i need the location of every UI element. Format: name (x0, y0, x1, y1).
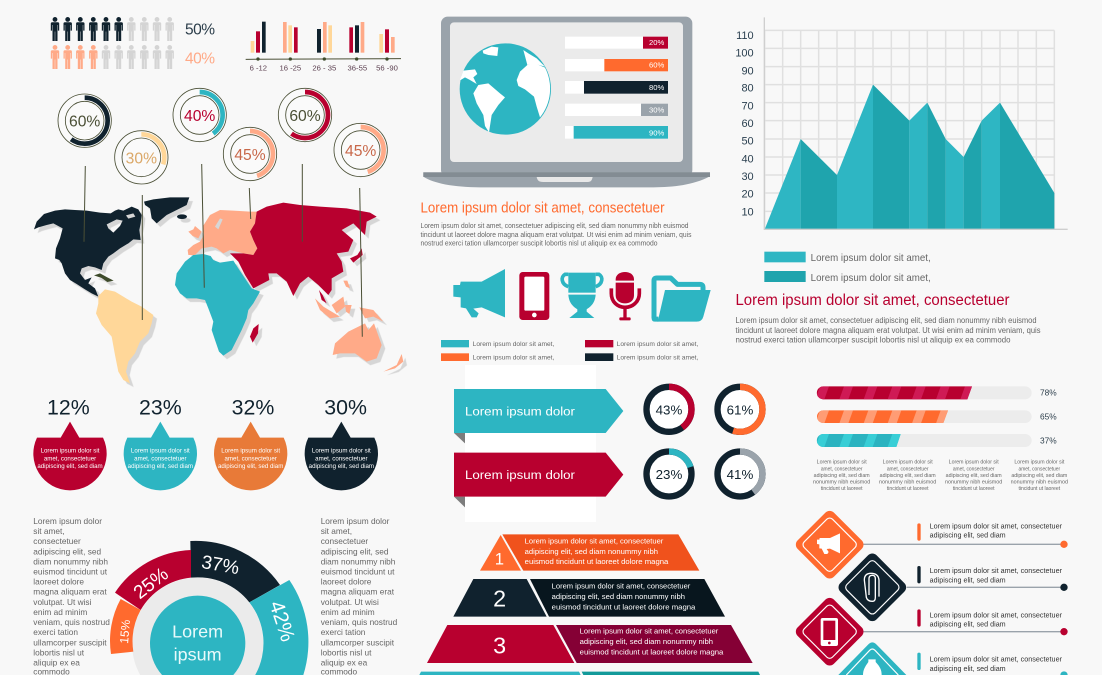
ring: 40% teal (173, 88, 226, 142)
caption column 4: nonummy nibh euismod (1011, 479, 1068, 485)
caption column 4: tincidunt ut laoreet (1018, 486, 1061, 492)
right text block: lobortis nisl ut (321, 647, 372, 657)
age group bar chart: 36-55 (348, 64, 367, 73)
item: teal bottle (838, 642, 1068, 675)
callout: 23% (124, 395, 197, 490)
legend: crimson (585, 340, 698, 348)
right text block: veniam, quis nostrud (321, 617, 398, 627)
left text block: veniam, quis nostrud (33, 617, 110, 627)
y axis labels: 50 (741, 136, 754, 148)
donut: 61% (717, 387, 762, 432)
age group bar chart: 6 -12 (250, 64, 267, 73)
right text block: diam nonummy nibh (321, 556, 396, 566)
y axis labels: 20 (741, 189, 754, 201)
left text block: magna aliquam erat (33, 587, 107, 597)
arrow: crimson (454, 453, 623, 507)
caption column 3 (945, 460, 1002, 492)
caption column 3: tincidunt ut laoreet (953, 486, 995, 492)
segment: 42%: 42% (265, 598, 299, 645)
caption column 1 (813, 460, 870, 492)
arrow: teal: Lorem ipsum dolor (465, 404, 575, 418)
item: teal bottle: adipiscing elit, sed diam (930, 666, 1006, 673)
caption column 1: adipiscing elit, sed diam (814, 473, 870, 479)
caption column 4: amet, consectetuer (1018, 466, 1060, 472)
left text block: enim ad minim (33, 607, 87, 617)
asia (230, 203, 377, 296)
y axis labels: 60 (741, 118, 754, 130)
age group bar chart: 56 -90 (376, 64, 398, 73)
laptop heading: Lorem ipsum dolor sit amet, consectetuer (420, 200, 665, 216)
arrows and donuts panel (454, 365, 762, 522)
greenland (144, 197, 189, 223)
ring: 45% salmon: 45% (234, 147, 266, 164)
drop callouts (33, 395, 378, 490)
laptop body text: tincidunt ut laoreet dolore magna aliquam erat volutpat. Ut wisi enim ad minim veniam, quis (420, 230, 692, 239)
y axis labels (735, 30, 754, 218)
progress: 78% (815, 386, 1057, 399)
caption column 2: tincidunt ut laoreet (887, 486, 929, 492)
chart body text: nostrud exerci tation ullamcorper suscipit lobortis nisl ut aliquip ex ea commodo (736, 336, 1011, 344)
tier 2: adipiscing elit, sed diam nonummy nibh (552, 594, 685, 601)
legend: navy: Lorem ipsum dolor sit amet, (617, 354, 698, 361)
callout: 23%: 23% (139, 395, 182, 419)
left text block: diam nonummy nibh (33, 556, 108, 566)
tier 1: Lorem ipsum dolor sit amet, consectetuer (525, 538, 664, 545)
europe (188, 210, 257, 255)
segment: 42% (249, 580, 308, 675)
callout: 23%: adipiscing elit, sed diam (128, 463, 193, 470)
callout: 32%: adipiscing elit, sed diam (218, 463, 283, 470)
ring: 40% teal: 40% (184, 108, 215, 125)
callout: 23%: Lorem ipsum dolor sit (131, 448, 190, 455)
new zealand (383, 354, 403, 372)
ring: 60% crimson: 60% (289, 108, 321, 125)
iceland (177, 214, 187, 219)
item: orange megaphone (793, 508, 1068, 581)
label: 50%: 50% (185, 22, 215, 38)
item: orange megaphone: adipiscing elit, sed diam (930, 533, 1006, 540)
label: 40%: 40% (185, 50, 215, 68)
y axis labels: 110 (736, 30, 754, 42)
south america (96, 289, 153, 383)
donut: 23% (646, 451, 691, 496)
people row: 50% (51, 17, 174, 41)
pyramid (419, 534, 760, 675)
south east asia islands (315, 281, 383, 322)
bar: 20% (565, 37, 668, 49)
left text block: laoreet dolore (33, 576, 84, 586)
item: navy paperclip: Lorem ipsum dolor sit amet, consectetuer (930, 568, 1063, 575)
item: teal bottle: Lorem ipsum dolor sit amet, consectetuer (930, 657, 1063, 664)
left text block: ullamcorper suscipit (33, 637, 107, 647)
legend: orange: Lorem ipsum dolor sit amet, (473, 354, 554, 361)
right text block: exerci tation (321, 627, 366, 637)
legend: teal (441, 340, 554, 348)
malay peninsula (319, 290, 327, 303)
right text block: adipiscing elit, sed (321, 546, 389, 556)
progress: 37% (815, 434, 1057, 447)
people pictograms (51, 17, 215, 69)
tier 1: euismod tincidunt ut laoreet dolore magna (525, 559, 668, 566)
right text block: enim ad minim (321, 607, 375, 617)
australia (333, 323, 382, 362)
left text block: sit amet, (33, 526, 65, 536)
madagascar (250, 324, 259, 343)
right text block: laoreet dolore (321, 576, 372, 586)
laptop body text (420, 221, 692, 248)
right text block: euismod tincidunt ut (321, 566, 395, 576)
icon: megaphone (453, 269, 505, 317)
progress bars (813, 386, 1068, 492)
caption column 2: nonummy nibh euismod (879, 479, 936, 485)
right text block: magna aliquam erat (321, 587, 395, 597)
caption column 2 (879, 460, 936, 492)
left text block: euismod tincidunt ut (33, 566, 108, 576)
right text block: aliquip ex ea (321, 658, 368, 668)
centre label: ipsum (174, 644, 222, 664)
progress: 37%: 37% (1040, 435, 1057, 445)
bar: 80%: 80% (649, 83, 665, 92)
icon: phone (519, 272, 549, 320)
callout: 30%: amet, consectetuer (315, 455, 368, 462)
ring: 45% salmon right (334, 123, 387, 177)
chart body text (736, 316, 1040, 344)
tier 3: Lorem ipsum dolor sit amet, consectetuer (580, 629, 719, 636)
laptop body text: Lorem ipsum dolor sit amet, consectetuer adipiscing elit, sed diam nonummy nibh euismod (420, 221, 688, 230)
bar: 60%: 60% (649, 61, 665, 70)
diamond icon list (793, 508, 1068, 675)
laptop screen (450, 22, 683, 162)
callout: 32% (214, 395, 287, 490)
caption column 1: amet, consectetuer (821, 466, 863, 472)
bar: 80% (565, 81, 668, 94)
donut: 61%: 61% (727, 402, 753, 417)
left text block: exerci tation (33, 627, 78, 637)
chart heading: Lorem ipsum dolor sit amet, consectetuer (736, 292, 1010, 309)
ring: 45% salmon right: 45% (345, 143, 376, 160)
segment: 37% (190, 541, 280, 602)
bar: 30%: 30% (649, 106, 665, 115)
y axis labels: 90 (741, 65, 754, 77)
ring: 60% crimson (278, 88, 332, 142)
progress: 65% (815, 410, 1057, 423)
legend: crimson: Lorem ipsum dolor sit amet, (617, 341, 698, 348)
left text block: lobortis nisl ut (33, 647, 85, 657)
caption column 2: Lorem ipsum dolor sit (883, 460, 933, 466)
age group bar chart: 16 -25 (279, 64, 301, 73)
left text block: Lorem ipsum dolor (33, 516, 102, 526)
bar: 30% (565, 104, 668, 116)
percentage rings (58, 88, 387, 184)
laptop base (423, 172, 710, 187)
callout: 23%: amet, consectetuer (134, 455, 187, 462)
donut: 43% (646, 387, 691, 432)
ring: 30% yellow: 30% (126, 150, 157, 167)
legend: orange (441, 353, 554, 361)
y axis labels: 70 (741, 101, 754, 113)
segment: 15%: 15% (117, 619, 133, 644)
y axis labels: 40 (741, 153, 754, 165)
callout: 32%: 32% (232, 395, 274, 419)
caption column 2: amet, consectetuer (887, 466, 929, 472)
radial segment chart (110, 541, 308, 675)
right text block: consectetuer (321, 536, 368, 546)
arrow: teal (454, 389, 623, 443)
caption column 4: adipiscing elit, sed diam (1011, 473, 1068, 479)
item: orange megaphone: Lorem ipsum dolor sit amet, consectetuer (930, 524, 1063, 531)
legend item dark (764, 271, 931, 284)
item: navy paperclip: adipiscing elit, sed diam (930, 577, 1006, 584)
arrow: crimson: Lorem ipsum dolor (465, 468, 575, 482)
legend: navy (585, 353, 698, 361)
right text block: Lorem ipsum dolor (321, 516, 390, 526)
caption column 3: adipiscing elit, sed diam (946, 473, 1002, 479)
right text block: ullamcorper suscipit (321, 637, 395, 647)
grid (765, 30, 1054, 229)
caption column 4 (1011, 460, 1068, 492)
segment: 25% (115, 550, 191, 610)
age group bar chart (246, 22, 401, 73)
tier 3: adipiscing elit, sed diam nonummy nibh (580, 639, 713, 646)
area fills (765, 85, 1054, 229)
callout: 30%: adipiscing elit, sed diam (309, 463, 374, 470)
laptop body (441, 17, 692, 177)
caption column 3: nonummy nibh euismod (945, 479, 1002, 485)
connector lines (863, 544, 1062, 632)
left text block: consectetuer (33, 536, 81, 546)
bar: 90%: 90% (649, 128, 665, 137)
left text block: adipiscing elit, sed (33, 546, 101, 556)
africa (175, 254, 260, 356)
tier 3: 3 (493, 633, 506, 659)
axes (764, 17, 1068, 229)
caption column 4: Lorem ipsum dolor sit (1014, 460, 1065, 466)
area chart (735, 17, 1068, 284)
y axis labels: 80 (741, 83, 754, 95)
legend item light: Lorem ipsum dolor sit amet, (811, 253, 931, 264)
callout: 30%: 30% (324, 395, 367, 419)
japan (350, 248, 363, 263)
tier 2: Lorem ipsum dolor sit amet, consectetuer (552, 584, 691, 591)
laptop body text: nostrud exerci tation ullamcorper suscipit lobortis nisl ut aliquip ex ea commodo (420, 238, 658, 248)
bar: 90% (565, 126, 668, 139)
legend item dark: Lorem ipsum dolor sit amet, (811, 273, 931, 284)
tier 2 (453, 579, 725, 617)
callout: 32%: Lorem ipsum dolor sit (221, 448, 280, 455)
item: crimson phone: adipiscing elit, sed diam (930, 621, 1006, 628)
pin lines (84, 164, 362, 337)
chart body text: tincidunt ut laoreet dolore magna aliquam erat volutpat. Ut wisi enim ad minim veniam, quis (736, 326, 1040, 335)
chart body text: Lorem ipsum dolor sit amet, consectetuer adipiscing elit, sed diam nonummy nibh euismod (736, 316, 1036, 325)
icon: folder (652, 278, 711, 322)
legend: teal: Lorem ipsum dolor sit amet, (473, 341, 554, 348)
caption column 2: adipiscing elit, sed diam (880, 473, 936, 479)
callout: 12%: 12% (47, 395, 90, 419)
y axis labels: 100 (735, 48, 754, 60)
donut: 41%: 41% (727, 467, 753, 482)
callout: 32%: amet, consectetuer (224, 455, 277, 462)
tier 1 (480, 534, 699, 571)
callout: 30%: Lorem ipsum dolor sit (312, 448, 371, 455)
item: crimson phone: Lorem ipsum dolor sit amet, consectetuer (930, 612, 1063, 619)
icon row and legend (441, 269, 711, 361)
segment: 15% (110, 599, 141, 654)
callout: 12%: adipiscing elit, sed diam (37, 463, 103, 470)
progress: 65%: 65% (1040, 411, 1057, 421)
tier 2: 2 (493, 585, 506, 611)
icon: microphone (611, 272, 639, 320)
caption column 1: tincidunt ut laoreet (821, 486, 863, 492)
y axis labels: 30 (741, 171, 754, 183)
callout: 12% (33, 395, 107, 490)
people row: 40% (51, 45, 174, 69)
tier 4 (419, 672, 760, 675)
donut: 23%: 23% (656, 467, 682, 482)
ring: 45% salmon (223, 127, 277, 181)
icon: trophy (562, 273, 602, 318)
left text block: aliquip ex ea (33, 658, 80, 668)
legend item light (764, 252, 931, 264)
tier 3: euismod tincidunt ut laoreet dolore magna (580, 650, 723, 657)
ring: 60% navy (58, 94, 111, 147)
left text block: volutpat. Ut wisi (33, 597, 92, 607)
inner circle (150, 596, 245, 675)
bar: 20%: 20% (649, 38, 665, 47)
callout: 30% (305, 395, 378, 490)
north america (34, 207, 142, 297)
tier 2: euismod tincidunt ut laoreet dolore magna (552, 604, 695, 611)
tier 1: adipiscing elit, sed diam nonummy nibh (525, 549, 658, 556)
y axis labels: 10 (741, 206, 754, 218)
segment: 37%: 37% (200, 552, 241, 579)
donut: 41% (717, 451, 762, 496)
tier 3 (427, 625, 753, 663)
caption column 1: nonummy nibh euismod (813, 479, 870, 485)
right text block: sit amet, (321, 526, 352, 536)
callout: 12%: amet, consectetuer (44, 455, 96, 462)
ring: 60% navy: 60% (69, 114, 100, 131)
bar: 60% (565, 59, 668, 71)
centre label: Lorem (172, 622, 223, 642)
age group bar chart: 26 - 35 (312, 64, 336, 73)
right text block: volutpat. Ut wisi (321, 597, 379, 607)
donut: 43%: 43% (656, 402, 682, 417)
cuba (94, 273, 114, 282)
white backing panel (465, 365, 596, 522)
caption column 1: Lorem ipsum dolor sit (817, 460, 867, 466)
caption column 3: amet, consectetuer (953, 466, 995, 472)
callout: 12%: Lorem ipsum dolor sit (41, 448, 100, 455)
world map (34, 197, 403, 383)
caption column 3: Lorem ipsum dolor sit (949, 460, 999, 466)
segment: 25%: 25% (130, 564, 173, 604)
laptop (423, 17, 710, 187)
gray ring (132, 578, 263, 675)
item: navy paperclip (836, 551, 1068, 624)
progress: 78%: 78% (1040, 388, 1057, 398)
globe (460, 43, 551, 135)
tier 1: 1 (495, 549, 504, 568)
ring: 30% yellow (115, 131, 168, 184)
item: crimson phone (793, 595, 1068, 668)
